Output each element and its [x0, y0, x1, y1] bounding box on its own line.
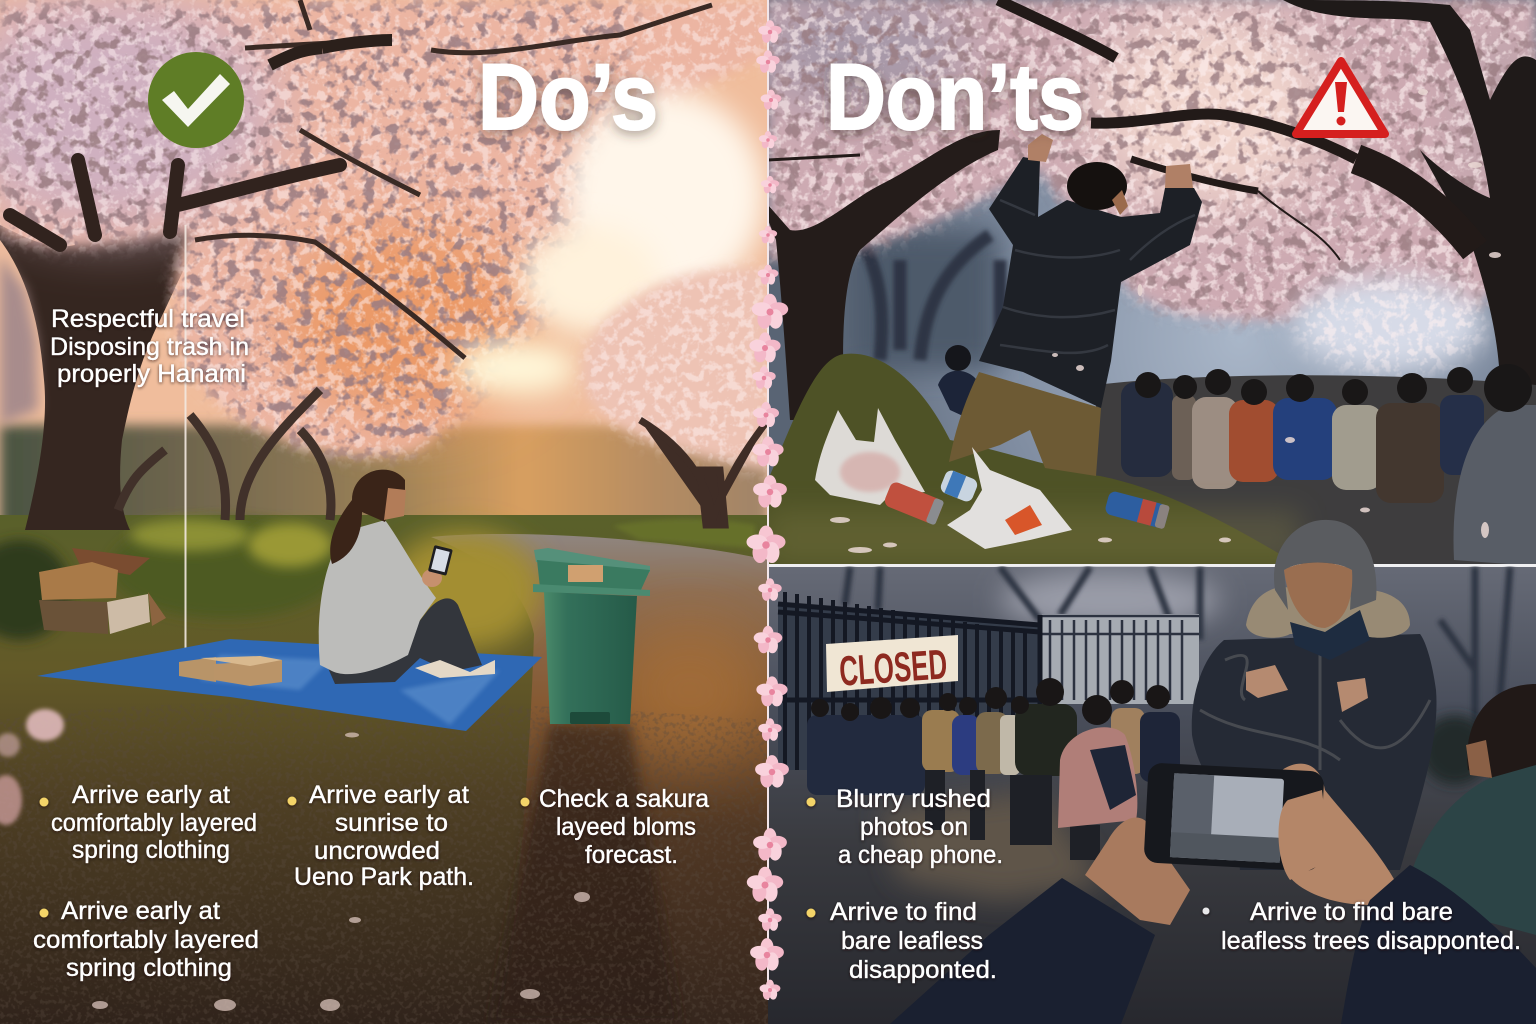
main trunk	[0, 224, 196, 530]
phone	[428, 545, 453, 576]
list item: bare trees: Arrive to find	[830, 898, 977, 926]
ground texture	[0, 701, 768, 1024]
lawn	[387, 530, 543, 650]
text: bare trees right: Arrive to find bare	[1250, 898, 1453, 926]
fur hood	[1246, 587, 1410, 638]
left pink edge behind text	[0, 255, 38, 425]
background trees	[850, 230, 1000, 370]
bushes	[0, 518, 340, 640]
right blossoming tree	[582, 268, 768, 525]
thick branches	[270, 40, 392, 65]
middle trees	[118, 390, 331, 520]
grass texture	[768, 510, 1300, 566]
jacket quilting	[1000, 200, 1195, 353]
list item: arrive early 2: Arrive early at	[61, 897, 220, 925]
text: bare trees right	[1202, 898, 1521, 955]
list item: sunrise: sunrise to	[335, 809, 448, 837]
divider line	[768, 564, 1536, 567]
jacket	[1192, 634, 1437, 870]
list item: forecast: forecast.	[585, 841, 678, 869]
text: bare trees right: leafless trees disapponted.	[1221, 927, 1521, 955]
face	[1284, 562, 1352, 628]
dark bushes right	[1420, 715, 1490, 785]
text: annotation: Disposing trash in	[50, 333, 249, 361]
text: annotation: properly Hanami	[57, 360, 246, 388]
text: annotation	[50, 305, 249, 388]
right hand	[1278, 764, 1400, 905]
second man in crowd	[938, 345, 978, 422]
list item: arrive early 2: spring clothing	[66, 954, 232, 982]
head	[1067, 162, 1127, 210]
green trash bin	[533, 548, 650, 724]
road	[432, 534, 767, 822]
list item: forecast: layeed bloms	[556, 813, 696, 841]
bright sky opening	[520, 90, 765, 335]
petal vine divider	[746, 0, 789, 1000]
list item: arrive early 2: comfortably layered	[33, 926, 259, 954]
branches	[195, 0, 712, 358]
litter cans	[883, 469, 1170, 529]
crowd	[1096, 364, 1536, 566]
grey background	[768, 567, 1536, 1024]
left hand	[1085, 818, 1190, 925]
branches	[768, 0, 1475, 260]
hand	[422, 569, 442, 587]
heading: don'ts: Don’ts	[826, 44, 1084, 149]
upper trunk forks	[10, 160, 340, 245]
blossom canopy	[750, 0, 1536, 330]
gate interior	[1042, 614, 1199, 704]
panel: don'ts bottom scene	[768, 567, 1536, 1024]
list item: sunrise: Arrive early at	[309, 781, 469, 809]
sweater	[319, 520, 436, 674]
cardboard boxes	[39, 548, 166, 634]
hair and ponytail	[330, 470, 405, 564]
jacket folds	[1200, 650, 1430, 770]
sunset sky	[0, 0, 768, 540]
panel: do's scene	[0, 0, 768, 1024]
picnic tarp	[37, 639, 542, 731]
face	[384, 488, 406, 520]
list item: sunrise	[288, 781, 474, 891]
hazy background	[769, 0, 1536, 476]
list item: blurry photos	[806, 785, 1003, 869]
heading: do's: Do’s	[478, 44, 658, 149]
lunch boxes	[179, 656, 282, 686]
closed sign	[826, 635, 958, 695]
misty sky	[1000, 570, 1220, 630]
list item: arrive early 1	[40, 781, 257, 864]
list item: sunrise: Ueno Park path.	[294, 863, 474, 891]
man in parka	[1192, 520, 1437, 870]
collar	[1290, 610, 1370, 660]
icon: warning triangle	[1296, 61, 1385, 134]
list item: forecast	[520, 785, 709, 869]
hedge	[613, 519, 755, 548]
annotation line	[184, 225, 186, 657]
plastic bags	[815, 408, 1072, 549]
ground path	[880, 790, 1105, 900]
left trunk and arch	[768, 130, 1000, 420]
phone body	[1144, 762, 1324, 872]
list item: bare trees: bare leafless	[841, 927, 983, 955]
list item: blurry photos: photos on	[860, 813, 968, 841]
list item: arrive early 1: spring clothing	[72, 836, 230, 864]
beanie	[1274, 520, 1377, 610]
trousers	[949, 372, 1101, 476]
text: annotation: Respectful travel	[51, 305, 245, 333]
jacket	[979, 157, 1202, 408]
scattered petals	[0, 709, 590, 1011]
queue of people	[807, 678, 1180, 860]
shoes	[415, 660, 495, 678]
list item: blurry photos: Blurry rushed	[836, 785, 991, 813]
fingers on phone	[1278, 790, 1330, 880]
sun	[453, 340, 577, 396]
crossed fists	[1246, 665, 1368, 712]
right trunk	[1283, 0, 1536, 390]
icon: green check	[148, 52, 244, 148]
man shaking branch	[949, 134, 1202, 476]
falling petals	[830, 89, 1501, 553]
list item: bare trees: disapponted.	[849, 956, 997, 984]
list item: arrive early 1: comfortably layered	[51, 809, 257, 837]
panel: don'ts top scene	[750, 0, 1536, 566]
neck	[1112, 190, 1128, 215]
bin shadow	[504, 720, 670, 1010]
list item: forecast: Check a sakura	[539, 785, 709, 813]
list item: arrive early 1: Arrive early at	[72, 781, 230, 809]
white blossom tree	[1295, 277, 1485, 373]
trousers	[328, 598, 482, 684]
woman	[319, 470, 495, 684]
foreground sleeves	[890, 865, 1536, 1024]
sunlit road glow	[612, 620, 768, 760]
person at right	[1405, 684, 1536, 935]
bare trees	[845, 567, 1510, 760]
iron fence	[778, 592, 1040, 770]
gate bars	[1042, 616, 1199, 700]
list item: bare trees	[806, 898, 997, 984]
list item: arrive early 2	[33, 897, 259, 982]
hands and phone	[1085, 762, 1400, 925]
distant tree band	[0, 416, 767, 515]
grass slope	[768, 354, 1300, 566]
list item: blurry photos: a cheap phone.	[838, 841, 1003, 869]
ground	[0, 515, 768, 1024]
phone screen	[1170, 773, 1284, 863]
list item: sunrise: uncrowded	[314, 837, 440, 865]
hands	[1028, 134, 1193, 188]
closed sign: CLOSED	[838, 640, 949, 695]
canopy: main tree	[0, 0, 768, 456]
